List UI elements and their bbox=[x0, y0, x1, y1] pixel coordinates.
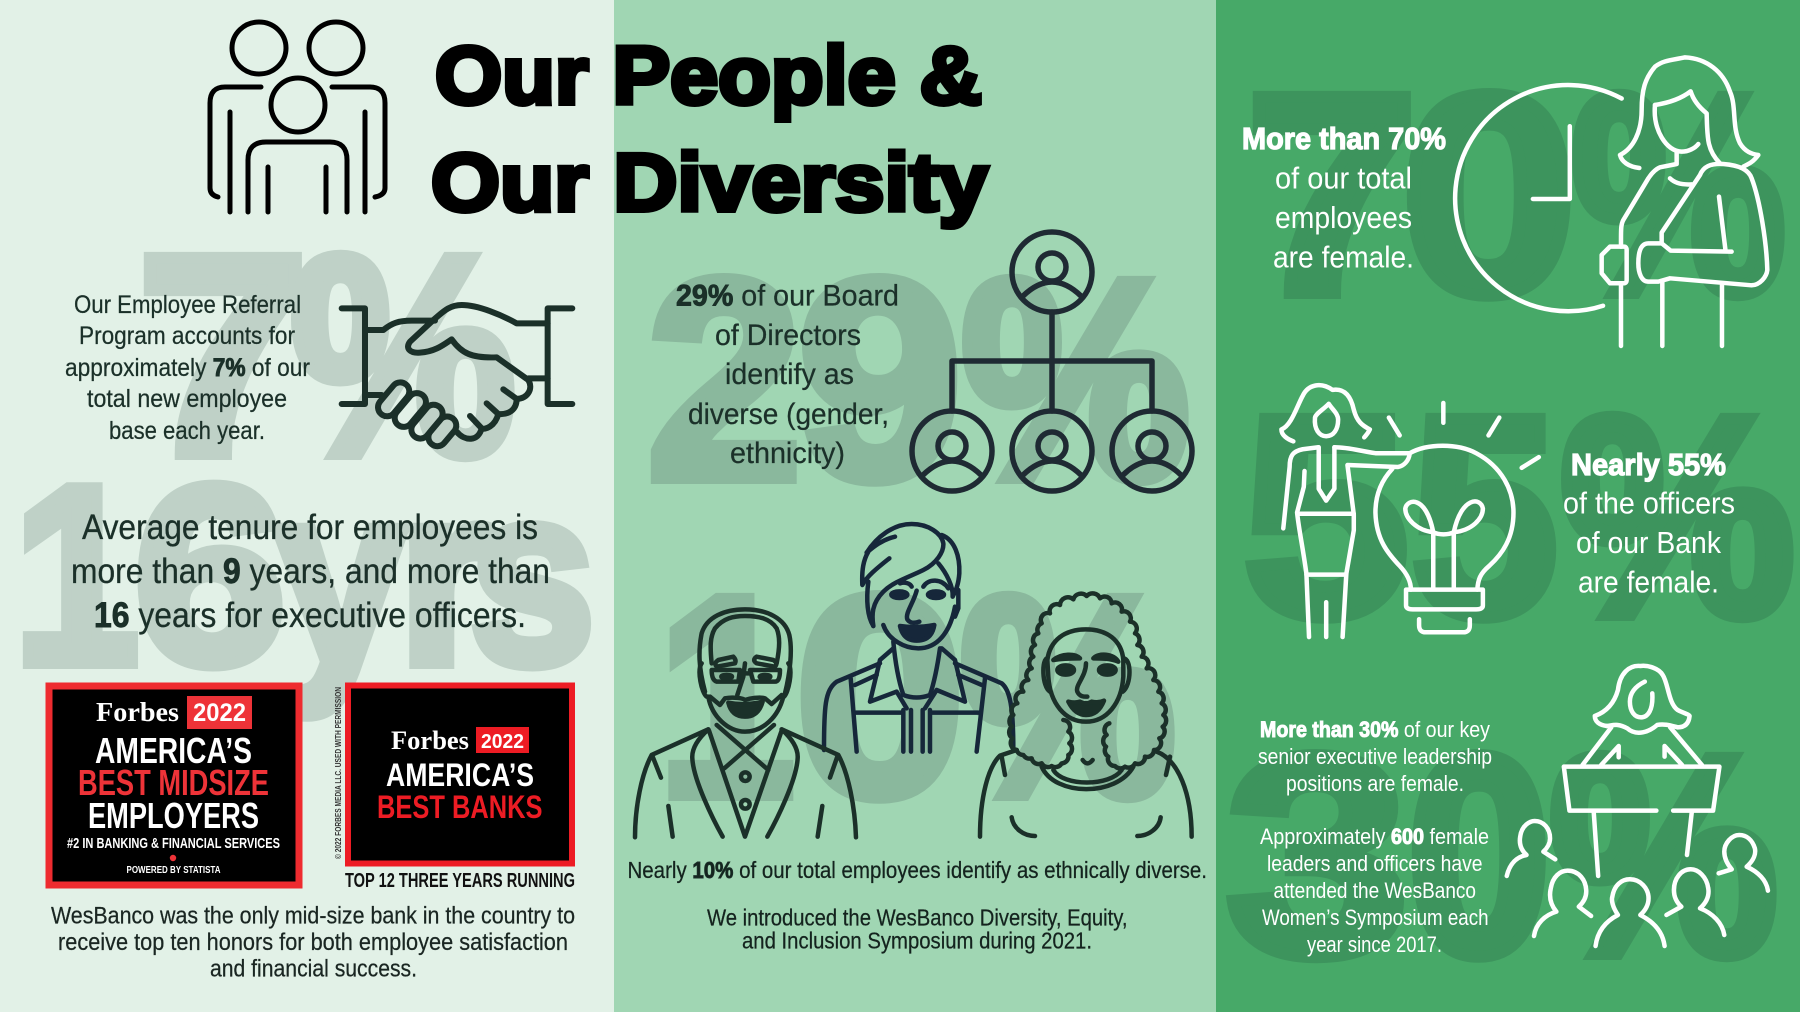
badge: Forbes best banks: Forbes bbox=[391, 726, 469, 755]
watermark: 55%: 5 bbox=[1243, 358, 1409, 676]
text: nearly 55%: of our Bank bbox=[1576, 525, 1721, 560]
text: employee referral: approximately 7% of our bbox=[65, 354, 310, 382]
text: board of directors: of Directors bbox=[715, 319, 861, 352]
icon: three diverse people bbox=[635, 524, 1192, 837]
badge: Forbes best midsize employers bbox=[49, 686, 299, 885]
title bbox=[431, 30, 988, 228]
watermark: 16yrs: r bbox=[398, 433, 493, 717]
badge: Forbes best banks: BEST BANKS bbox=[377, 789, 542, 825]
panel: middle background bbox=[614, 0, 1216, 1012]
text: more than 30% and women's symposium bbox=[1258, 717, 1492, 957]
text: more than 30% and women's symposium: leaders and officers have bbox=[1267, 851, 1482, 876]
watermark: 16yrs: 1 bbox=[14, 433, 139, 717]
text: employee referral: Our Employee Referral bbox=[74, 291, 301, 319]
icon: org chart bbox=[912, 232, 1192, 491]
text: symposium: and Inclusion Symposium during 2021. bbox=[742, 928, 1092, 954]
text: more than 70%: are female. bbox=[1273, 240, 1414, 274]
text: more than 70%: employees bbox=[1275, 200, 1412, 235]
text: more than 30% and women's symposium: attended the WesBanco bbox=[1274, 878, 1476, 903]
text: nearly 55%: of the officers bbox=[1563, 486, 1735, 520]
icon: three people bbox=[210, 22, 385, 212]
text: board of directors: ethnicity) bbox=[730, 437, 845, 470]
watermark: 30%: 3 bbox=[1226, 697, 1409, 1012]
text: tenure: more than 9 years, and more than bbox=[71, 552, 550, 591]
watermark: 29%: 9 bbox=[798, 221, 962, 539]
badge: Forbes best midsize employers: EMPLOYERS bbox=[88, 795, 259, 836]
text: board of directors: 29% of our Board bbox=[676, 280, 899, 312]
icon: woman with light bulb bbox=[1281, 385, 1539, 637]
text: WesBanco honors bbox=[51, 902, 575, 982]
text: tenure: Average tenure for employees is bbox=[82, 508, 538, 547]
icon: handshake bbox=[342, 305, 572, 450]
text: employee referral bbox=[65, 291, 310, 445]
text: more than 70%: of our total bbox=[1275, 160, 1412, 196]
watermark: 55%: 5 bbox=[1411, 358, 1558, 676]
person: older man bbox=[635, 609, 856, 837]
text: more than 70%: More than 70% bbox=[1242, 121, 1446, 156]
text: more than 70% bbox=[1242, 121, 1446, 274]
person: woman with curly hair bbox=[980, 593, 1192, 837]
text: nearly 55%: are female. bbox=[1578, 564, 1719, 600]
text: ethnically diverse: Nearly 10% of our total employees identify as ethnically diverse. bbox=[628, 857, 1207, 883]
watermark: 10%: 1 bbox=[658, 538, 795, 856]
text: nearly 55% bbox=[1563, 447, 1735, 600]
watermark: 7%: % bbox=[290, 197, 516, 515]
text: tenure: 16 years for executive officers. bbox=[94, 596, 526, 635]
badge: Forbes best banks: AMERICA’S bbox=[386, 757, 534, 793]
text: employee referral: Program accounts for bbox=[79, 322, 295, 350]
icon: speaker at podium with audience bbox=[1507, 666, 1768, 946]
text: tenure bbox=[71, 508, 550, 635]
text: employee referral: total new employee bbox=[87, 385, 287, 413]
badge: Forbes best midsize employers: #2 IN BANKING & FINANCIAL SERVICES bbox=[67, 835, 280, 852]
watermark: 10%: % bbox=[960, 538, 1176, 856]
panel: left background bbox=[0, 0, 614, 1012]
text: WesBanco honors: WesBanco was the only mid-size bank in the country to bbox=[51, 902, 575, 930]
text: more than 30% and women's symposium: More than 30% of our key bbox=[1260, 717, 1491, 742]
text: more than 30% and women's symposium: Women’s Symposium each bbox=[1262, 905, 1488, 930]
watermark: 10%: 0 bbox=[795, 538, 965, 856]
watermark: 29%: % bbox=[961, 221, 1190, 539]
text: employee referral: base each year. bbox=[109, 417, 265, 445]
badge: Forbes best midsize employers: 2022 bbox=[193, 699, 246, 727]
watermark: 16yrs: 6 bbox=[134, 433, 286, 717]
badge: Forbes best midsize employers: Forbes bbox=[96, 697, 179, 727]
watermark: 70%: 7 bbox=[1246, 36, 1418, 354]
text: more than 30% and women's symposium: senior executive leadership bbox=[1258, 744, 1492, 769]
watermark: 16yrs: y bbox=[275, 433, 405, 717]
watermark: 30%: % bbox=[1549, 697, 1778, 1012]
badge: Forbes best midsize employers: POWERED BY STATISTA bbox=[126, 865, 220, 876]
person: woman with short hair bbox=[824, 524, 1013, 752]
text: board of directors bbox=[676, 280, 899, 470]
text: nearly 55%: Nearly 55% bbox=[1571, 447, 1726, 482]
badge: Forbes best banks: 2022 bbox=[481, 731, 524, 753]
text: top 12 three years running: TOP 12 THREE YEARS RUNNING bbox=[345, 870, 575, 892]
text: WesBanco honors: receive top ten honors for both employee satisfaction bbox=[58, 929, 568, 956]
watermark: 7%: 7 bbox=[137, 197, 309, 515]
text: board of directors: diverse (gender, bbox=[688, 398, 889, 431]
text: board of directors: identify as bbox=[725, 358, 854, 391]
watermark: 16yrs: s bbox=[470, 433, 595, 717]
text: symposium bbox=[707, 904, 1128, 954]
watermark: 70%: 0 bbox=[1401, 36, 1577, 354]
badge: Forbes best midsize employers: BEST MIDSIZE bbox=[78, 762, 269, 803]
text: more than 30% and women's symposium: positions are female. bbox=[1286, 771, 1464, 796]
watermark: 30%: 0 bbox=[1407, 697, 1551, 1012]
text: more than 30% and women's symposium: Approximately 600 female bbox=[1260, 824, 1489, 849]
text: more than 30% and women's symposium: year since 2017. bbox=[1307, 932, 1442, 957]
text: copyright: © 2022 FORBES MEDIA LLC. USED WITH PERMISSION bbox=[333, 687, 343, 859]
text: WesBanco honors: and financial success. bbox=[210, 956, 417, 982]
badge: Forbes best midsize employers: AMERICA’S bbox=[95, 730, 252, 771]
title: Our Diversity bbox=[431, 138, 988, 228]
text: symposium: We introduced the WesBanco Diversity, Equity, bbox=[707, 904, 1128, 930]
badge: Forbes best banks bbox=[348, 686, 572, 864]
panel: right background bbox=[1216, 0, 1800, 1012]
title: Our People & bbox=[435, 30, 982, 122]
icon: woman with clock bbox=[1455, 57, 1767, 346]
watermark: 29%: 2 bbox=[647, 221, 802, 539]
